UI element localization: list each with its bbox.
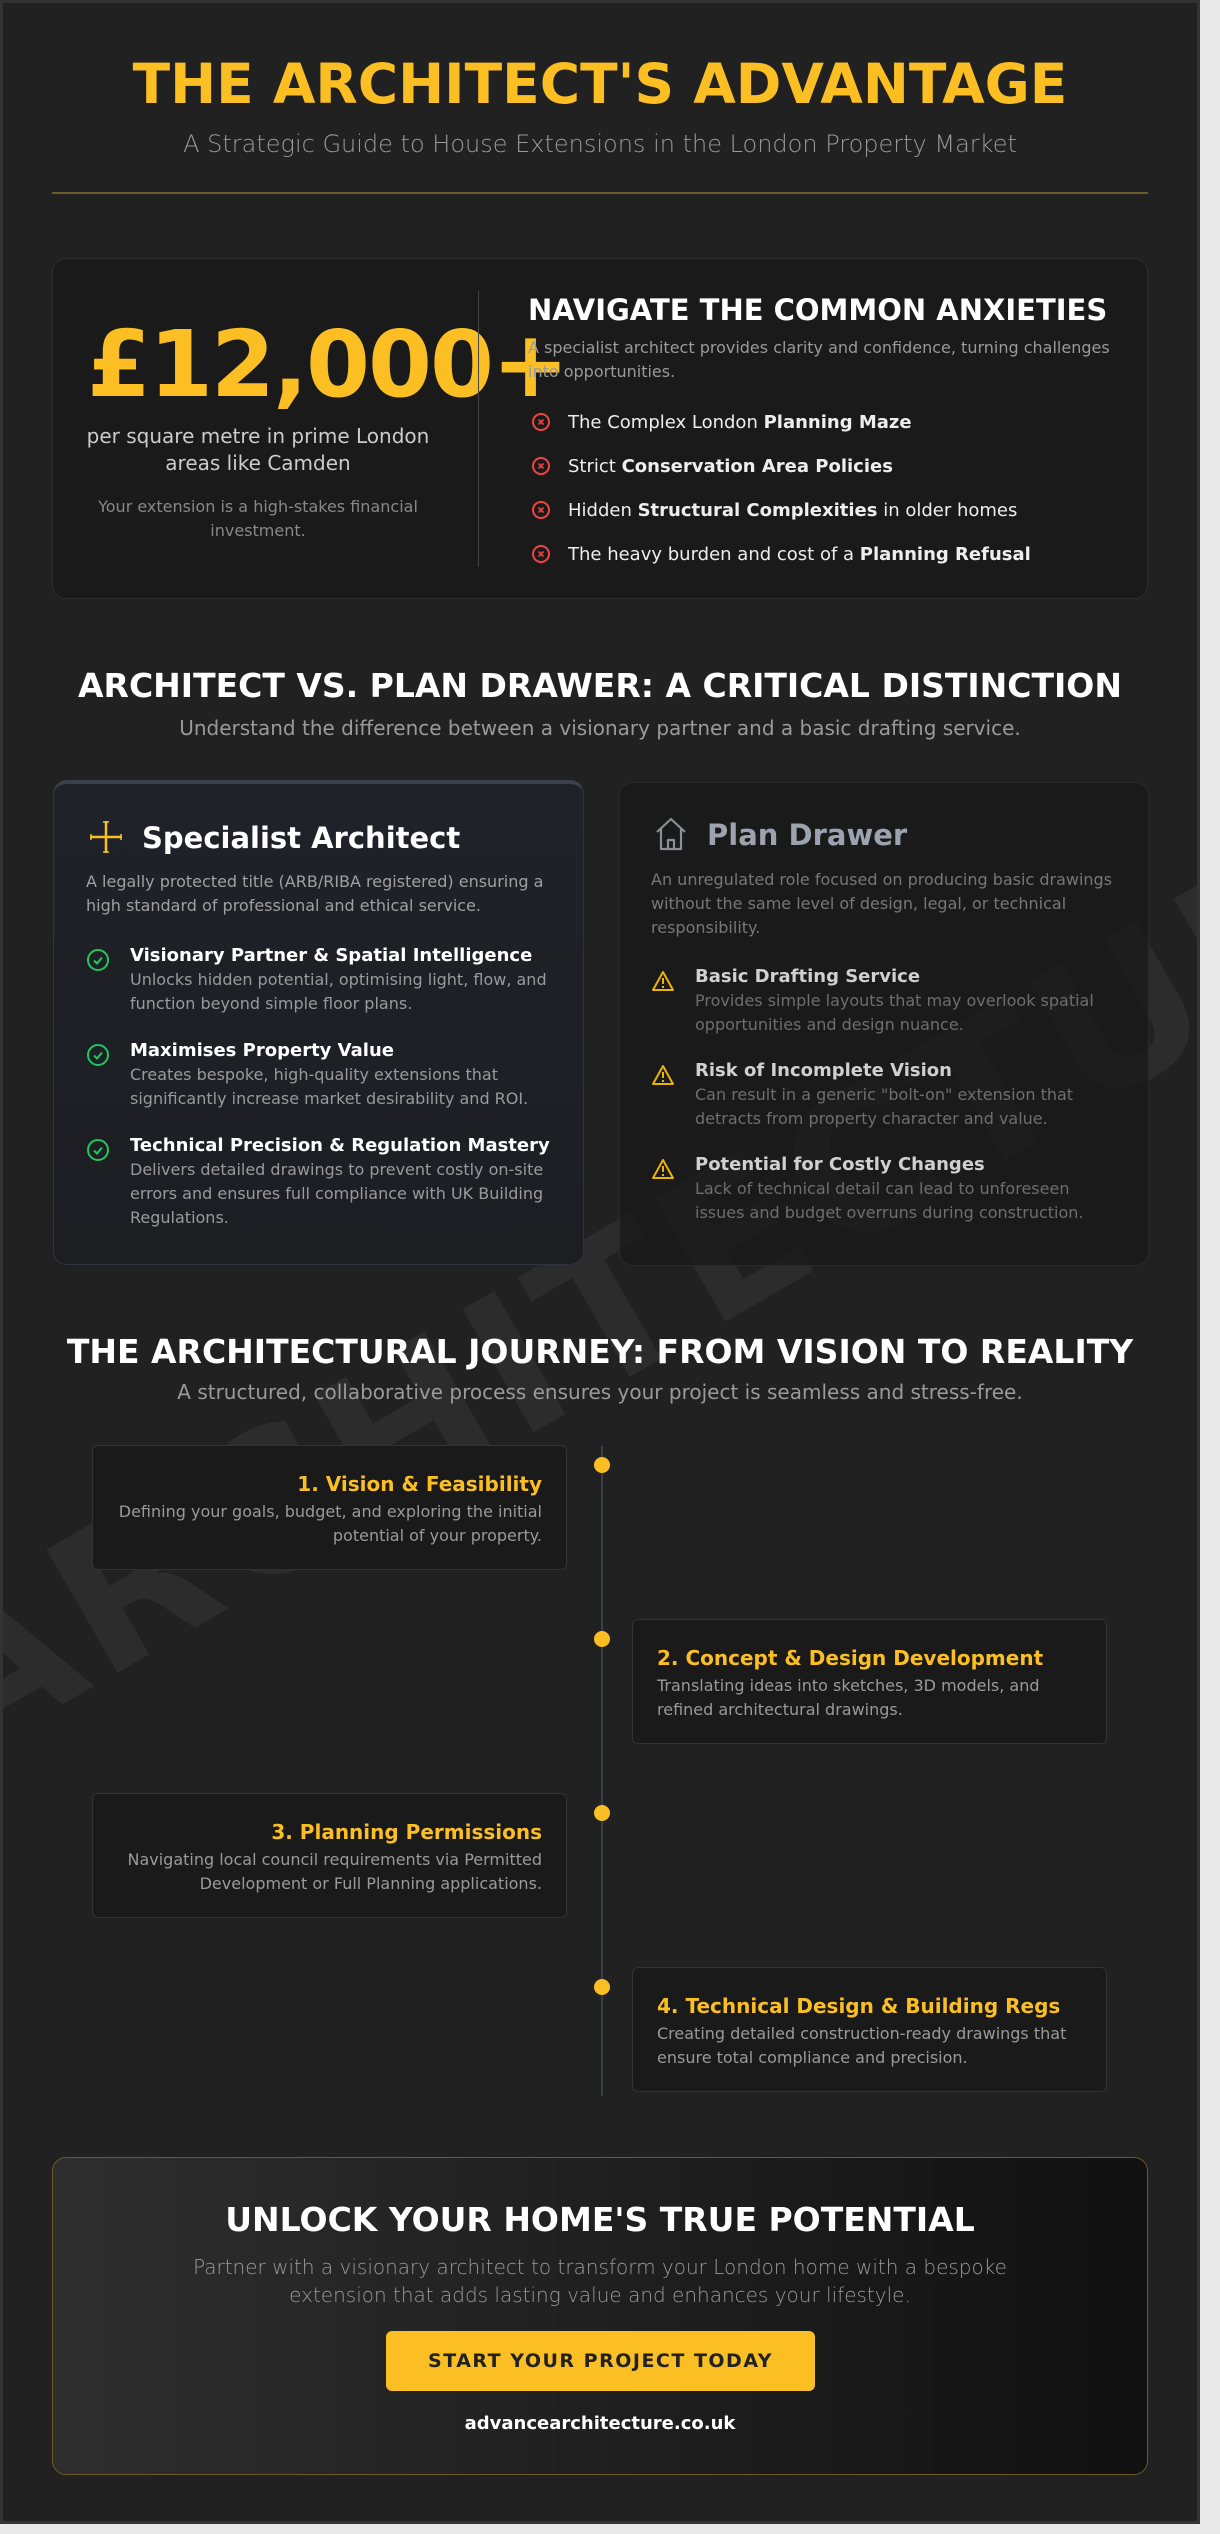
heading: journey: THE ARCHITECTURAL JOURNEY: FROM VISION TO REALITY (67, 1332, 1133, 1371)
benefits list: Maximises Property Value (130, 1040, 394, 1061)
step 1: 1. Vision & Feasibility (297, 1472, 542, 1496)
title: THE ARCHITECT'S ADVANTAGE (133, 52, 1067, 116)
subtitle: A Strategic Guide to House Extensions in the London Property Market (183, 130, 1017, 158)
heading: Plan Drawer (707, 818, 907, 852)
heading: anxieties: NAVIGATE THE COMMON ANXIETIES (528, 293, 1107, 327)
drawbacks list: Can result in a generic "bolt-on" extension that detracts from property character and value. (695, 1085, 1073, 1128)
timeline (92, 1445, 1107, 2096)
benefits list (87, 945, 550, 1227)
subheading: Understand the difference between a visionary partner and a basic drafting service. (179, 716, 1021, 740)
step 1: Defining your goals, budget, and exploring the initial potential of your property. (119, 1502, 542, 1545)
heading: architect vs plan drawer: ARCHITECT VS. PLAN DRAWER: A CRITICAL DISTINCTION (78, 666, 1122, 705)
panel: cost and anxieties (52, 258, 1148, 599)
step 2 (632, 1619, 1107, 1744)
anxieties list: Hidden Structural Complexities in older homes (568, 500, 1017, 520)
CTA button (386, 2331, 815, 2391)
anxieties description: A specialist architect provides clarity and confidence, turning challenges into opportunities. (528, 338, 1110, 381)
step 4: Creating detailed construction-ready drawings that ensure total compliance and precision. (657, 2024, 1066, 2067)
step 3: 3. Planning Permissions (271, 1820, 542, 1844)
benefits list: Technical Precision & Regulation Mastery (130, 1135, 550, 1156)
benefits list: Visionary Partner & Spatial Intelligence (130, 945, 532, 966)
website: advancearchitecture.co.uk (465, 2413, 735, 2434)
drawbacks list: issues and budget overruns during construction. (695, 1203, 1084, 1222)
step 4 (632, 1967, 1107, 2092)
anxieties list (532, 412, 1031, 564)
icon: house (656, 818, 686, 850)
CTA button: START YOUR PROJECT TODAY (428, 2350, 773, 2372)
benefits list: Unlocks hidden potential, optimising light, flow, and function beyond simple floor plans. (130, 970, 547, 1013)
stat: £12,000+: £12,000+ (87, 311, 567, 418)
panel: specialist architect (53, 780, 584, 1265)
panel: call to action (52, 2157, 1148, 2475)
description: An unregulated role focused on producing basic drawings without the same level of design, legal, or technical responsibility. (651, 870, 1112, 937)
anxieties list: The Complex London Planning Maze (568, 412, 912, 432)
drawbacks list: Lack of technical detail can lead to unforeseen (695, 1179, 1069, 1198)
journey subheading: A structured, collaborative process ensures your project is seamless and stress-free. (177, 1380, 1023, 1404)
CTA heading: UNLOCK YOUR HOME'S TRUE POTENTIAL (225, 2200, 975, 2239)
drawbacks list: Provides simple layouts that may overlook spatial opportunities and design nuance. (695, 991, 1094, 1034)
benefits list: Creates bespoke, high-quality extensions that significantly increase market desirability and ROI. (130, 1065, 528, 1108)
heading: Specialist Architect (142, 821, 460, 855)
CTA text: Partner with a visionary architect to transform your London home with a bespoke extension that adds lasting value and enhances your lifestyle. (193, 2255, 1007, 2307)
drawbacks list: Potential for Costly Changes (695, 1154, 985, 1175)
stat note: Your extension is a high-stakes financial investment. (98, 497, 418, 540)
step 4: 4. Technical Design & Building Regs (657, 1994, 1060, 2018)
drawbacks list: Basic Drafting Service (695, 966, 920, 987)
benefits list: Delivers detailed drawings to prevent costly on-site errors and ensures full compliance with UK Building Regulations. (130, 1160, 543, 1227)
drawbacks list (652, 966, 1094, 1222)
icon: compass cross (90, 821, 122, 853)
step 1 (92, 1445, 567, 1570)
step 3 (92, 1793, 567, 1918)
drawbacks list: Risk of Incomplete Vision (695, 1060, 952, 1081)
anxieties list: The heavy burden and cost of a Planning Refusal (568, 544, 1031, 564)
description: A legally protected title (ARB/RIBA registered) ensuring a high standard of professional and ethical service. (86, 872, 543, 915)
step 3: Navigating local council requirements via Permitted Development or Full Planning applications. (127, 1850, 542, 1893)
stat caption: per square metre in prime London areas like Camden (87, 424, 429, 475)
step 2: 2. Concept & Design Development (657, 1646, 1043, 1670)
anxieties list: Strict Conservation Area Policies (568, 456, 893, 476)
step 2: Translating ideas into sketches, 3D models, and refined architectural drawings. (657, 1676, 1040, 1719)
panel: plan drawer (619, 782, 1149, 1266)
